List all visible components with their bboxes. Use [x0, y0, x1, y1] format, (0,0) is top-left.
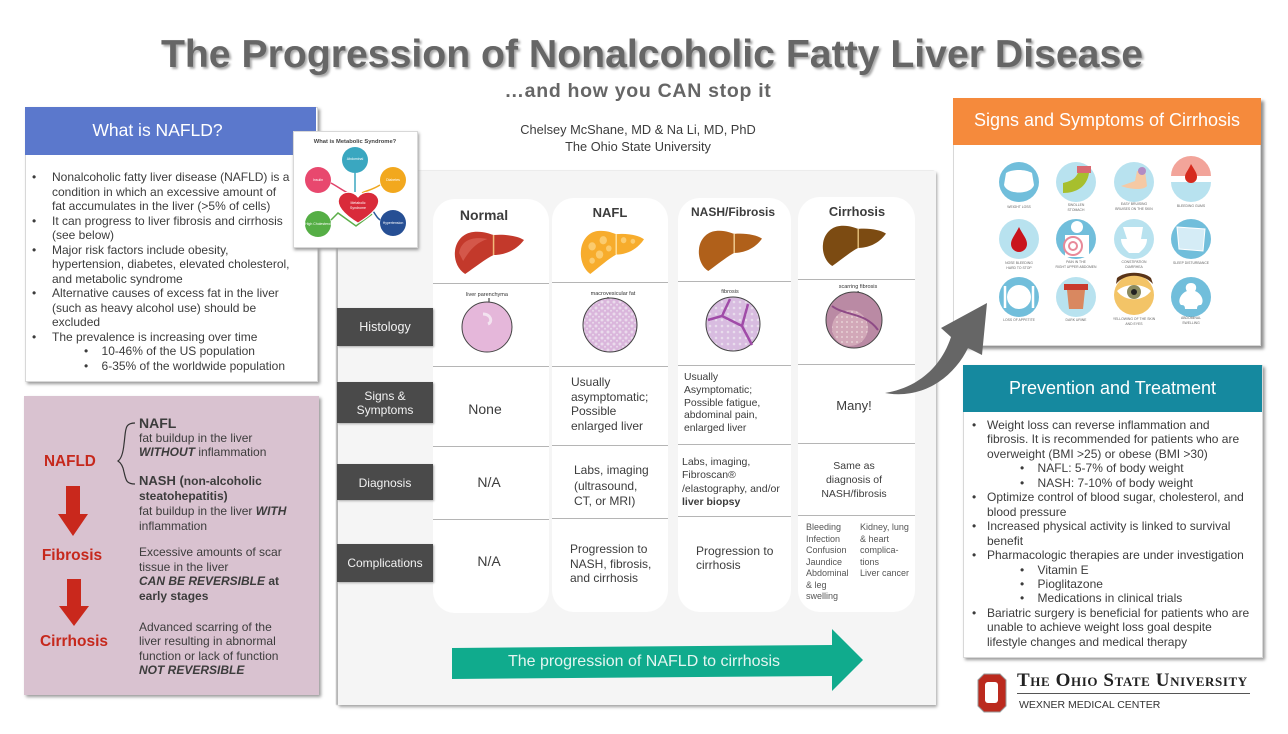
arrow: NAFLD to fibrosis	[58, 486, 88, 536]
text: fibrosis description: CAN BE REVERSIBLE at	[139, 574, 279, 588]
text: prevention and treatment: •	[972, 418, 976, 432]
label: cirrhosis: Cirrhosis	[40, 633, 108, 650]
cell: NASH signs: abdominal pain,	[684, 410, 757, 421]
heading: NASH/Fibrosis: NASH/Fibrosis	[691, 205, 775, 219]
text: prevention and treatment: •	[972, 519, 976, 533]
cell: NAFL signs: asymptomatic;	[571, 390, 648, 404]
image: metabolic syndrome diagram	[293, 131, 418, 248]
image: metabolic syndrome diagram: Abdominal	[347, 157, 363, 161]
row label: signs and symptoms: Symptoms	[357, 403, 413, 417]
text: prevention and treatment: •	[972, 548, 976, 562]
image: metabolic syndrome diagram: Hypertension	[383, 221, 403, 225]
cell: NAFL diagnosis	[574, 463, 649, 508]
text: prevention and treatment: Weight loss can reverse inflammation and	[987, 418, 1210, 432]
text: prevention and treatment: overweight (BMI >25) or obese (BMI >30)	[987, 447, 1208, 461]
text: NAFLD definition: Alternative causes of excess fat in the liver	[52, 286, 279, 300]
image: metabolic syndrome diagram: High Cholesterol	[305, 222, 331, 226]
histology: normal: liver parenchyma	[466, 292, 509, 298]
cell: cirrhosis complications: swelling	[806, 591, 838, 601]
text: NASH: inflammation	[139, 519, 207, 533]
histology: cirrhosis	[826, 284, 882, 348]
subtitle: …and how you CAN stop it	[504, 80, 772, 102]
cell: NAFL complications	[570, 542, 651, 585]
text: prevention and treatment: unable to achieve weight loss goal despite	[987, 620, 1212, 634]
symptom icons: STOMACH	[1068, 208, 1085, 212]
cell: NASH diagnosis: Fibroscan®	[682, 469, 736, 481]
symptom icons: DARK URINE	[1066, 318, 1087, 322]
cell: cirrhosis complications, continued: complica-	[860, 545, 899, 555]
text: prevention and treatment: • NASH: 7-10% of body weight	[1020, 476, 1193, 490]
text: prevention and treatment: •	[972, 490, 976, 504]
cell: NASH signs: enlarged liver	[684, 423, 746, 434]
cell: NASH signs: Asymptomatic;	[684, 385, 752, 396]
cell: cirrhosis complications: Infection	[806, 534, 840, 544]
authors: The Ohio State University	[565, 139, 711, 154]
cell: NAFL signs: Usually	[571, 375, 610, 389]
text: NASH	[139, 473, 287, 533]
title: The Progression of Nonalcoholic Fatty Liver Disease	[161, 33, 1143, 76]
row label: histology	[337, 308, 433, 346]
row label: complications	[337, 544, 433, 582]
cell: cirrhosis complications: & leg	[806, 580, 827, 590]
histology: fibrosis: fibrosis	[721, 289, 739, 295]
heading: cirrhosis: Cirrhosis	[829, 204, 885, 219]
symptom icons: WEIGHT LOSS	[1007, 205, 1031, 209]
cell: cirrhosis complications: Confusion	[806, 545, 847, 555]
text: prevention and treatment: fibrosis. It is recommended for patients who are	[987, 432, 1239, 446]
heading: NAFL: NAFL	[593, 205, 627, 220]
column: cirrhosis	[798, 197, 915, 612]
arrow: progression of NAFLD to cirrhosis	[452, 629, 863, 691]
cell: NASH signs: Possible fatigue,	[684, 398, 760, 409]
cell: normal complications: N/A	[477, 553, 501, 569]
cell: cirrhosis diagnosis: Same as	[833, 460, 875, 472]
text: cirrhosis description: NOT REVERSIBLE	[139, 663, 244, 677]
text: prevention and treatment: • NAFL: 5-7% of body weight	[1020, 461, 1184, 475]
cell: cirrhosis complications: Abdominal	[806, 568, 849, 578]
cell: cirrhosis complications: Jaundice	[806, 556, 842, 566]
text: prevention and treatment: •	[972, 606, 976, 620]
text: NAFLD definition: Nonalcoholic fatty liver disease (NAFLD) is a	[52, 170, 289, 184]
cell: cirrhosis diagnosis	[821, 460, 887, 500]
text: NASH: fat buildup in the liver WITH	[139, 504, 286, 518]
row label: signs and symptoms: Signs &	[364, 389, 406, 403]
cell: NASH diagnosis	[682, 456, 780, 508]
text: NAFLD definition: •	[32, 242, 36, 256]
heading: prevention and treatment: Prevention and Treatment	[1009, 378, 1216, 398]
cell: NAFL diagnosis: CT, or MRI)	[574, 494, 635, 508]
cell: normal signs: None	[468, 401, 502, 417]
panel: signs and symptoms of cirrhosis	[953, 98, 1261, 346]
symptom icons: YELLOWING OF THE SKIN	[1113, 317, 1156, 321]
label: fibrosis: Fibrosis	[42, 547, 102, 564]
cell: NAFL complications: NASH, fibrosis,	[570, 556, 651, 570]
text: fibrosis description: early stages	[139, 588, 208, 602]
row label: diagnosis: Diagnosis	[359, 476, 411, 490]
text: NAFLD definition: • 10-46% of the US population	[84, 344, 255, 358]
symptom icons: DIARRHEA	[1125, 265, 1143, 269]
text: cirrhosis description: liver resulting in abnormal	[139, 634, 276, 648]
text: prevention and treatment: benefit	[987, 534, 1023, 548]
cell: NAFL signs	[571, 375, 648, 432]
authors: Chelsey McShane, MD & Na Li, MD, PhD	[520, 122, 756, 137]
symptom icons: BLEEDING GUMS	[1177, 204, 1206, 208]
panel: progression table	[338, 171, 936, 705]
text: fibrosis description	[139, 545, 282, 602]
symptom icons: ABDOMINAL	[1181, 316, 1201, 320]
heading: prevention and treatment	[963, 365, 1262, 412]
text: NAFLD definition: (such as heavy alcohol use) should be	[52, 300, 256, 314]
logo: university name: The Ohio State University	[1017, 670, 1248, 691]
icon: normal liver	[454, 232, 524, 274]
row label: histology: Histology	[359, 320, 411, 334]
histology: cirrhosis: scarring fibrosis	[839, 284, 878, 290]
text: cirrhosis description: function or lack of function	[139, 649, 278, 663]
cell: NAFL complications: Progression to	[570, 542, 647, 556]
text: cirrhosis description: Advanced scarring of the	[139, 620, 272, 634]
symptom icons: BRUISES ON THE SKIN	[1115, 207, 1153, 211]
cell: NASH complications: Progression to	[696, 544, 773, 558]
column: NASH fibrosis	[678, 198, 791, 612]
symptom icons: SWELLING	[1182, 321, 1200, 325]
cell: cirrhosis diagnosis: NASH/fibrosis	[821, 488, 887, 500]
cell: cirrhosis diagnosis: diagnosis of	[826, 474, 882, 486]
cell: NAFL complications: and cirrhosis	[570, 571, 638, 585]
text: prevention and treatment: Increased physical activity is linked to survival	[987, 519, 1230, 533]
cell: cirrhosis complications	[806, 522, 849, 601]
cell: cirrhosis complications, continued: & heart	[860, 534, 889, 544]
text: fibrosis description: tissue in the liver	[139, 560, 228, 574]
histology: NAFL	[582, 291, 638, 352]
panel: prevention and treatment	[963, 365, 1263, 658]
image: metabolic syndrome diagram: Insulin	[313, 178, 323, 182]
heading: what is NAFLD: What is NAFLD?	[92, 120, 223, 140]
heading: signs and symptoms: Signs and Symptoms of Cirrhosis	[974, 110, 1240, 130]
text: NAFLD definition: •	[32, 330, 36, 344]
cell: NAFL signs: enlarged liver	[571, 418, 643, 432]
text: NAFLD definition: Major risk factors include obesity,	[52, 242, 229, 256]
cell: cirrhosis complications: Bleeding	[806, 522, 841, 532]
text: NAFLD definition: •	[32, 170, 36, 184]
text: prevention and treatment: Pharmacologic therapies are under investigation	[987, 548, 1244, 562]
logo: Ohio State block O	[978, 674, 1006, 712]
cell: normal diagnosis: N/A	[477, 474, 501, 490]
symptom icons: LOSS OF APPETITE	[1003, 318, 1036, 322]
text: NAFLD definition: condition in which an excessive amount of	[52, 184, 276, 198]
text: fibrosis description: Excessive amounts of scar	[139, 545, 282, 559]
cell: NASH diagnosis: liver biopsy	[682, 496, 740, 508]
authors	[520, 122, 756, 154]
arrow: cirrhosis to signs	[885, 303, 987, 394]
column: normal	[433, 199, 549, 613]
row label: diagnosis	[337, 464, 433, 500]
text: prevention and treatment: • Pioglitazone	[1020, 577, 1103, 591]
bracket	[117, 422, 135, 485]
text: NAFLD definition: (see below)	[52, 228, 114, 242]
cell: cirrhosis signs: Many!	[836, 398, 872, 413]
text: NAFLD definition: and metabolic syndrome	[52, 272, 183, 286]
text: NAFL	[139, 415, 266, 459]
image: metabolic syndrome diagram: Diabetes	[386, 178, 400, 182]
logo: Wexner Medical Center: WEXNER MEDICAL CENTER	[1019, 699, 1160, 711]
text: NAFLD definition: • 6-35% of the worldwide population	[84, 358, 285, 372]
image: metabolic syndrome diagram: Metabolic	[351, 201, 366, 205]
symptom icons: PAIN IN THE	[1066, 260, 1087, 264]
cell: cirrhosis complications, continued: Kidney, lung	[860, 522, 909, 532]
cell: NASH signs: Usually	[684, 372, 718, 383]
text: NAFLD definition: •	[32, 214, 36, 228]
label: progression arrow: The progression of NAFLD to cirrhosis	[508, 653, 780, 670]
row label: complications: Complications	[347, 556, 423, 570]
row label: signs and symptoms	[337, 382, 433, 423]
text: NAFL: NAFL	[139, 415, 176, 431]
histology: fibrosis	[706, 289, 760, 352]
column headings: Normal	[460, 207, 508, 223]
cell: NAFL signs: Possible	[571, 404, 616, 418]
icon: cirrhosis liver	[822, 226, 886, 266]
label: NAFLD: NAFLD	[44, 453, 96, 470]
symptom icons: HARD TO STOP	[1006, 266, 1032, 270]
column: NAFL	[552, 198, 668, 612]
text: prevention and treatment: Optimize control of blood sugar, cholesterol, and	[987, 490, 1244, 504]
text: prevention and treatment: lifestyle changes and medical therapy	[987, 635, 1187, 649]
text: prevention and treatment: Bariatric surgery is beneficial for patients who are	[987, 606, 1249, 620]
heading: signs and symptoms	[953, 98, 1261, 145]
text: NASH: NASH (non-alcoholic	[139, 473, 262, 488]
text: NAFLD definition: The prevalence is increasing over time	[52, 330, 257, 344]
symptom icons: EASY BRUISING	[1121, 202, 1148, 206]
cell: NAFL diagnosis: Labs, imaging	[574, 463, 649, 477]
cell: NASH complications	[696, 544, 773, 572]
symptom icons: SLEEP DISTURBANCE	[1173, 261, 1210, 265]
cell: cirrhosis complications, continued	[860, 522, 909, 578]
histology: normal	[462, 292, 512, 352]
cell: NASH diagnosis: Labs, imaging,	[682, 456, 750, 468]
symptom icons: RIGHT UPPER ABDOMEN	[1055, 265, 1097, 269]
histology: NAFL: macrovesicular fat	[591, 291, 636, 297]
cell: NASH signs	[684, 372, 760, 434]
cell: NASH complications: cirrhosis	[696, 558, 741, 572]
text: prevention and treatment: • Medications in clinical trials	[1020, 591, 1182, 605]
arrow: fibrosis to cirrhosis	[59, 579, 89, 626]
symptom icons: SWOLLEN	[1068, 203, 1085, 207]
cell: NASH diagnosis: /elastography, and/or	[682, 483, 780, 495]
text: prevention and treatment: blood pressure	[987, 505, 1066, 519]
image: metabolic syndrome diagram: What is Metabolic Syndrome?	[314, 139, 397, 145]
text: prevention and treatment: • Vitamin E	[1020, 563, 1089, 577]
text: NAFL: fat buildup in the liver	[139, 431, 252, 445]
text: NAFL: WITHOUT inflammation	[139, 445, 266, 459]
symptom icons: NOSE BLEEDING	[1005, 261, 1033, 265]
cell: cirrhosis complications, continued: Liver cancer	[860, 568, 909, 578]
text: NAFLD definition: •	[32, 286, 36, 300]
cell: cirrhosis complications, continued: tions	[860, 556, 879, 566]
symptom icons	[999, 156, 1211, 326]
icon: NASH liver	[698, 230, 762, 271]
text: cirrhosis description	[139, 620, 278, 677]
panel: what is NAFLD	[25, 107, 318, 382]
symptom icons: CONSTIPATION	[1122, 260, 1147, 264]
text: NAFLD definition: excluded	[52, 315, 100, 329]
text: NASH: steatohepatitis)	[139, 489, 228, 503]
text: NAFLD definition: It can progress to liver fibrosis and cirrhosis	[52, 214, 283, 228]
image: metabolic syndrome diagram: Syndrome	[350, 206, 366, 210]
text: prevention and treatment	[972, 418, 1249, 649]
icon: NAFL liver	[580, 230, 644, 274]
text: NAFLD definition	[32, 170, 290, 372]
text: NAFLD definition: fat accumulates in the liver (>5% of cells)	[52, 199, 270, 213]
heading: what is NAFLD	[25, 107, 316, 155]
symptom icons: AND EYES	[1125, 322, 1143, 326]
cell: NAFL diagnosis: (ultrasound,	[574, 478, 637, 492]
panel: NAFLD definitions	[24, 396, 319, 695]
text: NAFLD definition: hypertension, diabetes, elevated cholesterol,	[52, 257, 290, 271]
